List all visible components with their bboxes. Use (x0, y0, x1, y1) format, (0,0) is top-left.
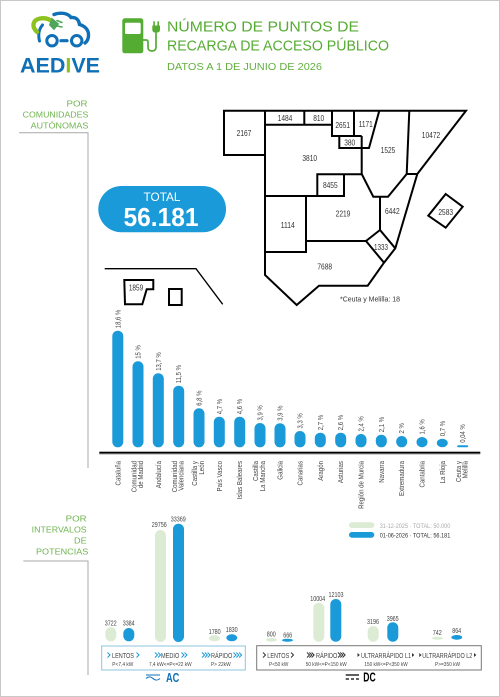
legend: 01-06-2026 · TOTAL: 56.181 (380, 532, 450, 539)
bar chart: DC power ranges: 3196 (367, 617, 379, 626)
percentage labels: 2,4 % (358, 416, 366, 432)
region labels: Valenciana (178, 461, 186, 491)
percentage labels: 1,6 % (419, 419, 427, 434)
region labels: Asturias (338, 460, 345, 483)
bar chart: DC power ranges: 864 (452, 626, 461, 635)
AC symbol and label: AC (166, 671, 179, 685)
bar chart: AC power ranges: 1830 (226, 625, 238, 634)
panel: DC categories: 150 kW<=P<350 kW (364, 662, 408, 668)
subtitle: DATOS A 1 DE JUNIO DE 2026 (167, 62, 323, 73)
map values: 2583 (438, 208, 454, 217)
map values: 1525 (381, 146, 396, 155)
map values: 810 (313, 114, 325, 123)
region labels: La Mancha (260, 461, 267, 491)
map values: 2219 (336, 209, 351, 218)
panel: DC categories: RÁPIDO (316, 651, 338, 660)
panel: DC categories: P<50 kW (269, 662, 289, 668)
percentage labels: 0,7 % (439, 421, 447, 436)
DC symbol and label: DC (363, 671, 376, 685)
region labels: Canarias (297, 460, 305, 485)
map values: 380 (344, 138, 356, 148)
map values: 1333 (374, 243, 388, 252)
bars (112, 331, 468, 447)
panel: AC categories: MEDIO (161, 651, 180, 660)
map values: 3810 (302, 154, 318, 163)
bar chart: DC power ranges: 12103 (328, 590, 344, 599)
percentage labels: 2,7 % (317, 415, 325, 430)
bar chart: AC power ranges: 29756 (152, 520, 167, 529)
panel: DC categories (257, 646, 481, 670)
DC symbol and label (346, 671, 376, 685)
map values: 2167 (237, 129, 252, 138)
bar chart: DC power ranges: 3965 (387, 614, 399, 623)
panel: AC categories: RÁPIDO (211, 651, 233, 660)
bar chart: DC power ranges: 742 (433, 628, 442, 637)
percentage labels: 15 % (135, 345, 143, 359)
region labels: Comunidad (131, 461, 139, 492)
total pill: TOTAL (144, 190, 181, 204)
map values: 2651 (335, 121, 351, 130)
title (167, 19, 389, 55)
percentage labels: 2,6 % (338, 415, 345, 430)
AC symbol and label (146, 671, 179, 685)
region labels: Cantabria (419, 461, 427, 488)
percentage labels: 18,6 % (115, 309, 122, 328)
map values: 6442 (385, 207, 400, 216)
map values: 1171 (359, 120, 373, 129)
bar chart: AC power ranges: 3384 (123, 618, 135, 628)
section heading: por comunidades autónomas: COMUNIDADES (23, 109, 89, 119)
map: charging points by region (105, 111, 466, 305)
percentage labels: 13,7 % (155, 352, 163, 371)
section heading: por intervalos de potencias (23, 514, 89, 675)
title: RECARGA DE ACCESO PÚBLICO (167, 38, 389, 55)
region labels: Islas Baleares (237, 460, 244, 499)
region labels: Castilla y (192, 460, 199, 486)
region labels: Comunidad (171, 461, 179, 492)
arrowheads (358, 653, 476, 657)
logo: AEDIVE (20, 13, 100, 78)
legend (349, 522, 450, 539)
percentage labels: 2,1 % (378, 417, 386, 432)
map values: 1484 (278, 114, 293, 123)
bar chart: AC power ranges: 1780 (209, 627, 221, 636)
section heading: por comunidades autónomas: AUTÓNOMAS (31, 120, 89, 130)
region labels: Extremadura (399, 461, 406, 496)
section heading: por intervalos de potencias: POR (66, 514, 87, 524)
panel: DC categories: ULTRARRÁPIDO L2 (422, 651, 472, 660)
panel: AC categories: LENTOS (112, 651, 134, 660)
total pill: 56.181 (124, 202, 198, 232)
region labels: Galicia (277, 461, 285, 480)
region labels: Aragón (317, 461, 325, 481)
region labels: Navarra (378, 461, 386, 483)
percentage labels: 4,6 % (237, 399, 244, 414)
percentage labels: 3,9 % (277, 405, 285, 421)
region labels: Región de Murcia (358, 461, 366, 509)
legend: 31-12-2025 · TOTAL: 50.000 (380, 523, 450, 530)
map values: 7688 (317, 262, 333, 272)
total pill (98, 186, 226, 232)
percentage labels: 2 % (399, 423, 406, 434)
percentage labels (115, 309, 467, 443)
region labels: La Rioja (439, 461, 447, 483)
region labels: Andalucía (155, 461, 163, 488)
region labels: Melilla (462, 461, 470, 478)
map note: *Ceuta y Melilla: 18 (340, 294, 400, 304)
panel: AC categories: P> 22kW (211, 662, 231, 668)
section heading: por comunidades autónomas (19, 99, 89, 468)
section heading: por intervalos de potencias: DE (74, 536, 87, 546)
bar chart: DC power ranges: 666 (283, 630, 292, 640)
bar chart: share by region (99, 309, 480, 509)
logo wordmark: AEDIVE (20, 54, 100, 78)
icon: charging pump (122, 18, 160, 53)
axis (99, 452, 480, 455)
percentage labels: 11,5 % (176, 365, 183, 383)
panel: AC categories (102, 646, 245, 670)
bar chart: DC power ranges: 10004 (310, 594, 325, 603)
percentage labels: 4,7 % (216, 399, 224, 414)
map values: 1114 (281, 221, 295, 230)
region labels: León (199, 461, 206, 475)
panel: AC categories: P<7,4 kW (112, 662, 134, 668)
section heading: por intervalos de potencias: INTERVALOS (32, 525, 87, 535)
percentage labels: 6,8 % (196, 390, 204, 406)
region labels (115, 460, 470, 509)
percentage labels: 3,3 % (297, 413, 305, 428)
region labels: Cataluña (115, 461, 122, 485)
panel: AC categories: 7,4 kW<=P<=22 kW (149, 662, 192, 668)
map values (129, 114, 454, 292)
chevrons and arrowheads (263, 652, 345, 658)
section heading: por comunidades autónomas: POR (66, 99, 88, 109)
region labels: Ceuta y (455, 460, 463, 482)
percentage labels: 0,04 % (460, 424, 467, 443)
bar chart: AC power ranges: 33369 (171, 514, 186, 524)
section heading: por intervalos de potencias: POTENCIAS (36, 546, 89, 556)
bar chart: DC power ranges (266, 590, 462, 642)
panel: DC categories: P>=350 kW (435, 662, 460, 668)
map values: 1859 (129, 284, 144, 292)
panel: DC categories: 50 kW<=P<150 kW (306, 662, 347, 668)
map values: 8455 (323, 181, 338, 190)
chevrons (108, 652, 242, 658)
region labels: de Madrid (138, 461, 145, 488)
panel: DC categories: ULTRARRÁPIDO L1 (361, 651, 411, 660)
icon: car with plug (33, 13, 89, 46)
title: NÚMERO DE PUNTOS DE (167, 19, 359, 36)
bar chart: AC power ranges (105, 514, 238, 642)
bar chart: DC power ranges: 800 (267, 630, 276, 638)
bar chart: AC power ranges: 3722 (105, 618, 117, 628)
panel: DC categories: LENTOS (267, 651, 289, 660)
map values: 10472 (422, 131, 441, 140)
region labels: Castilla (253, 461, 260, 481)
region labels: País Vasco (216, 461, 224, 491)
percentage labels: 3,9 % (257, 405, 265, 420)
